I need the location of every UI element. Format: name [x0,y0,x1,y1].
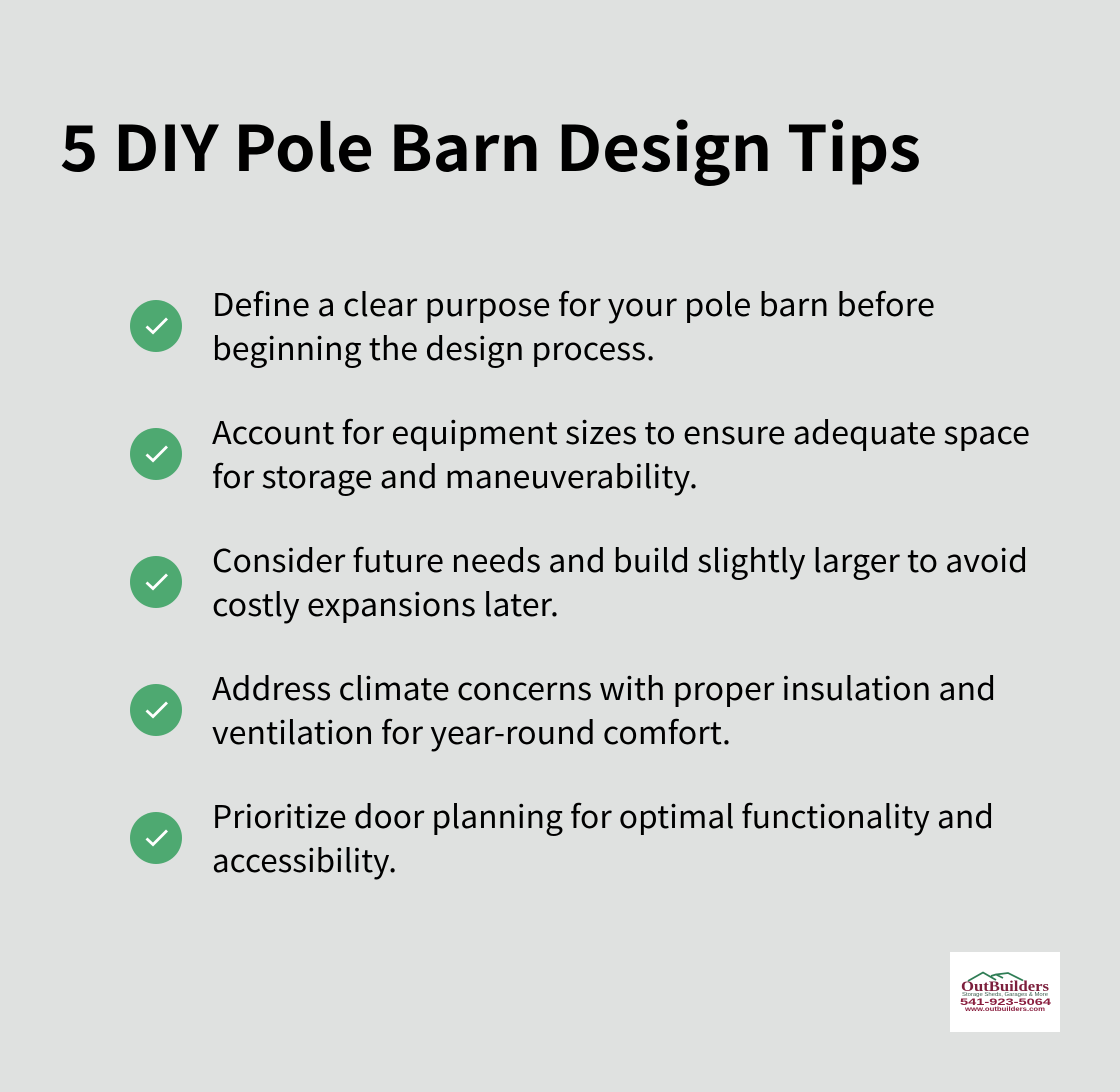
tip 3 text: Consider future needs and build slightly larger to avoid [212,536,1028,582]
title: 5 DIY Pole Barn Design Tips [60,99,921,190]
tip 3 text [212,536,1028,626]
icon: check badge 5 [130,812,182,864]
tip 2 [130,408,1030,498]
tip 2 text: for storage and maneuverability. [212,452,698,498]
tip 3 text: costly expansions later. [212,580,559,626]
logo phone: 541-923-5064 [960,997,1051,1007]
tip 4 text [212,664,996,754]
logo: OutBuilders [950,952,1060,1032]
tip 5 [130,792,994,882]
tip 2 text [212,408,1030,498]
icon: check badge 1 [130,300,182,352]
tip 4 [130,664,996,754]
tip 3 [130,536,1028,626]
tip 4 text: ventilation for year-round comfort. [212,708,731,754]
tip 1 [130,280,935,370]
tip 5 text [212,792,994,882]
tip 4 text: Address climate concerns with proper insulation and [212,664,996,710]
tip 5 text: accessibility. [212,836,397,882]
tip 1 text: beginning the design process. [212,324,655,370]
tip 5 text: Prioritize door planning for optimal functionality and [212,792,994,838]
icon: check badge 3 [130,556,182,608]
tip 1 text: Define a clear purpose for your pole barn before [212,280,935,326]
logo tagline: Storage Sheds, Garages & More [962,992,1048,998]
logo wordmark: OutBuilders [961,979,1049,995]
icon: check badge 2 [130,428,182,480]
icon: check badge 4 [130,684,182,736]
logo url: www.outbuilders.com [964,1007,1045,1013]
tip 2 text: Account for equipment sizes to ensure adequate space [212,408,1030,454]
tip 1 text [212,280,935,370]
icon: roofline [968,972,1023,981]
